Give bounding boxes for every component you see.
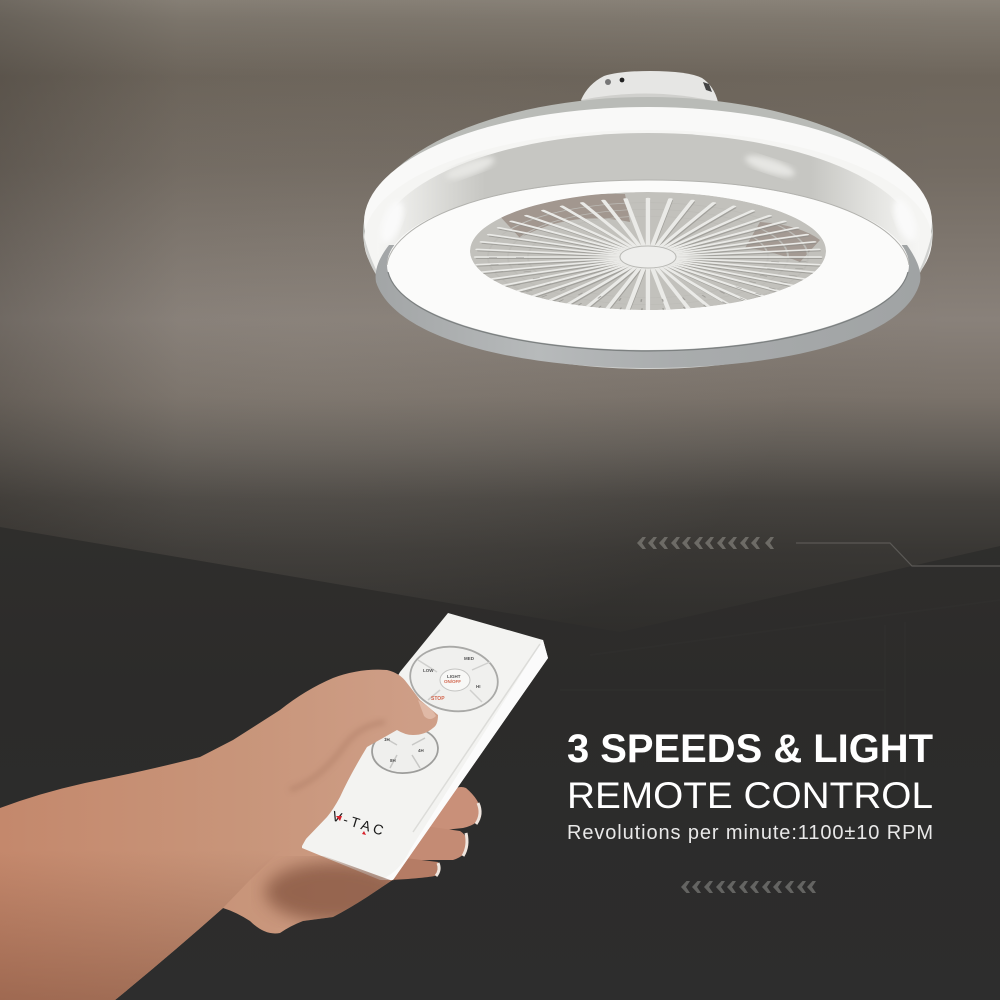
remote V-TAC logo: V-TAC [330, 808, 385, 838]
hand and arm [0, 670, 438, 1000]
palm and fingers behind the remote [0, 787, 481, 1000]
callout line [796, 543, 1000, 566]
remote speed dial [406, 641, 502, 717]
remote speed dial: ON/OFF [444, 679, 461, 684]
fan grille [470, 192, 826, 317]
specification text: Revolutions per minute:1100±10 RPM [567, 822, 933, 844]
remote timer dial [370, 724, 440, 776]
remote speed dial: LOW [423, 668, 434, 673]
heading: remote control: REMOTE CONTROL [567, 775, 933, 816]
decorative chevron row, top [637, 537, 774, 549]
ceiling fan [363, 71, 933, 369]
remote control [302, 613, 548, 880]
white diffuser disc [387, 180, 909, 350]
silver lower ring [363, 228, 933, 369]
logo red accent [336, 816, 366, 835]
remote timer dial: 8H [390, 758, 396, 763]
remote speed dial: HI [476, 684, 480, 689]
remote timer dial: 4H [418, 748, 424, 753]
heading: 3 speeds and light: 3 SPEEDS & LIGHT [567, 727, 933, 771]
remote timer dial: 1H [384, 737, 390, 742]
remote speed dial: STOP [431, 696, 445, 702]
remote speed dial: MED [464, 656, 475, 661]
disc edge lines [387, 180, 909, 265]
fan body shell [363, 97, 933, 367]
fan mounting bracket [581, 71, 718, 108]
remote speed dial: LIGHT [447, 674, 461, 679]
fan hub [620, 246, 676, 268]
disc lower shadow line [388, 272, 908, 351]
decorative chevron row, bottom [681, 881, 816, 893]
